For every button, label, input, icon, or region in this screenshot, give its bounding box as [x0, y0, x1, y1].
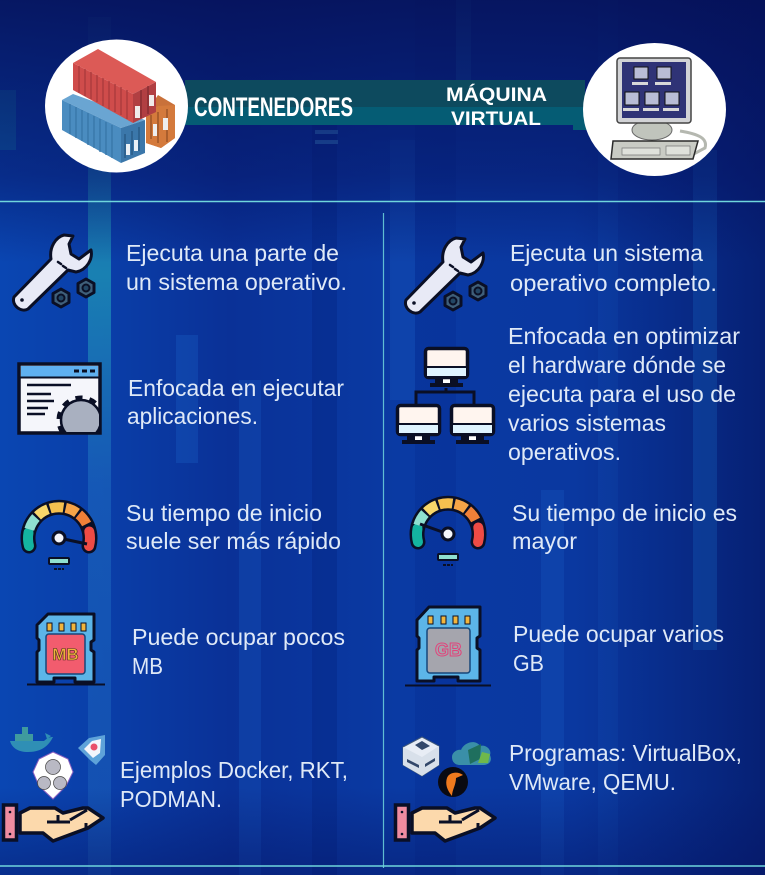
icon: GB card: GB	[435, 640, 462, 660]
icon: hand	[4, 805, 103, 841]
icon: virtualbox	[403, 737, 439, 776]
text: aplicaciones	[127, 375, 344, 429]
text: programas	[509, 740, 742, 795]
panel: maquina virtual	[396, 238, 742, 841]
text: varios GB: Puede ocupar varios	[513, 621, 724, 647]
heading: maquina virtual: VIRTUAL	[451, 108, 541, 130]
icon: containers	[45, 40, 188, 172]
icon: MB card: MB	[52, 645, 79, 664]
heading: contenedores: CONTENEDORES	[194, 92, 353, 122]
text: aplicaciones: aplicaciones.	[127, 403, 258, 429]
heading: maquina virtual: MÁQUINA	[446, 83, 547, 106]
text: inicio mayor: Su tiempo de inicio es	[512, 500, 737, 526]
text: inicio rapido: Su tiempo de inicio	[126, 500, 322, 526]
icon: hand	[396, 805, 495, 841]
icon: application window	[19, 364, 103, 442]
text: pocos MB: Puede ocupar pocos	[132, 624, 345, 650]
text: ejemplos: PODMAN.	[120, 786, 222, 812]
text: optimizar hardware: varios sistemas	[508, 410, 666, 436]
text: optimizar hardware: ejecuta para el uso de	[508, 381, 736, 407]
icon: rkt	[78, 735, 105, 765]
icon: qemu	[438, 767, 468, 797]
panel: contenedores	[4, 235, 348, 841]
text: parte del sistema: un sistema operativo.	[126, 269, 347, 295]
text: ejemplos	[120, 757, 348, 812]
icon: networked monitors	[398, 348, 494, 444]
heading: maquina virtual	[446, 83, 547, 130]
text: sistema completo: Ejecuta un sistema	[510, 240, 703, 266]
text: optimizar hardware: Enfocada en optimizar	[508, 323, 740, 349]
text: sistema completo	[510, 240, 717, 296]
text: inicio mayor	[512, 500, 737, 554]
icon: podman seals	[33, 752, 73, 799]
text: varios GB	[513, 621, 724, 676]
icon: vmware	[452, 742, 491, 765]
text: optimizar hardware: operativos.	[508, 439, 621, 465]
icon: wrench	[13, 235, 94, 310]
text: programas: VMware, QEMU.	[509, 769, 676, 795]
text: varios GB: GB	[513, 650, 544, 676]
text: ejemplos: Ejemplos Docker, RKT,	[120, 757, 348, 783]
text: optimizar hardware: el hardware dónde se	[508, 352, 726, 378]
icon: MB card	[27, 614, 105, 684]
icon: slow gauge	[417, 503, 479, 565]
icon: wrench	[405, 238, 486, 313]
text: pocos MB: MB	[132, 653, 163, 679]
icon: fast gauge	[28, 507, 90, 569]
icon: computer	[583, 43, 726, 176]
title band	[185, 80, 591, 130]
text: inicio mayor: mayor	[512, 528, 577, 554]
text: parte del sistema	[126, 240, 347, 295]
text: programas: Programas: VirtualBox,	[509, 740, 742, 766]
text: parte del sistema: Ejecuta una parte de	[126, 240, 339, 266]
text: aplicaciones: Enfocada en ejecutar	[128, 375, 344, 401]
text: inicio rapido: suele ser más rápido	[126, 528, 341, 554]
icon: GB card	[405, 607, 491, 686]
text: sistema completo: operativo completo.	[510, 270, 717, 296]
text: pocos MB	[132, 624, 345, 679]
icon: docker whale	[10, 727, 53, 752]
text: inicio rapido	[126, 500, 341, 554]
text: optimizar hardware	[508, 323, 740, 465]
